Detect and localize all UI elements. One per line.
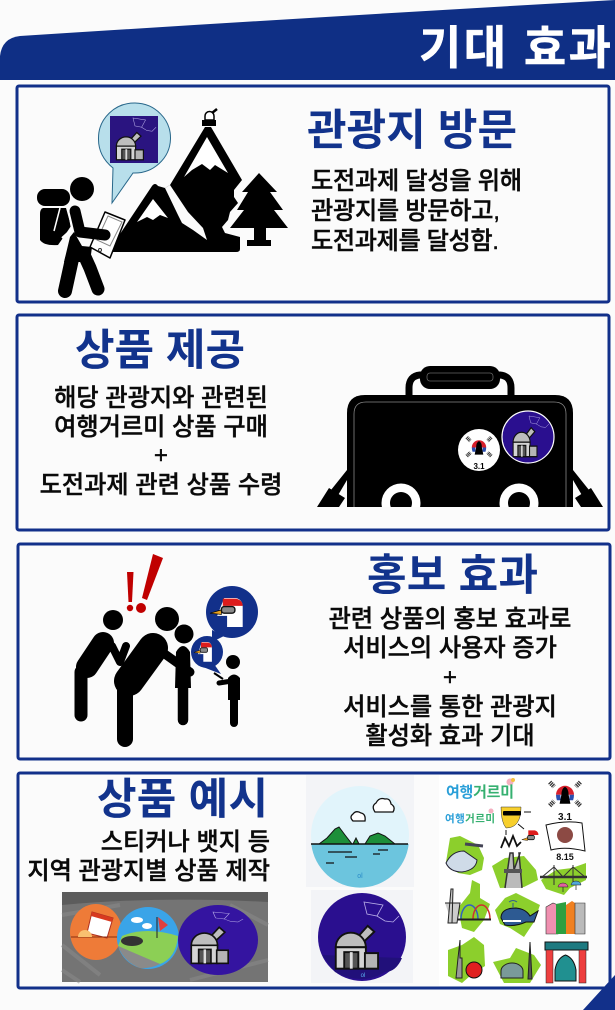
icon: speech bubble with observatory (98, 103, 170, 203)
title: 기대 효과 (419, 22, 611, 74)
icon: hiker with phone (37, 177, 125, 291)
body text: 도전과제를 달성함. (311, 228, 499, 255)
panel: promotion effect (18, 544, 610, 759)
heading: 상품 예시 (97, 776, 268, 824)
body text: 여행거르미 상품 구매 (54, 414, 268, 441)
body text (40, 385, 282, 499)
flag stickers: 8.15 (556, 852, 574, 862)
body text: + (443, 664, 457, 691)
landmark icons (445, 844, 588, 983)
logo stickers: 여행거르미 (446, 784, 514, 801)
badge: island: ol (357, 873, 363, 880)
body text: 서비스를 통한 관광지 (343, 694, 557, 721)
logo stickers (445, 778, 515, 825)
body text (329, 606, 571, 750)
body text: 도전과제 달성을 위해 (311, 168, 522, 195)
body text: 스티커나 뱃지 등 (101, 829, 270, 856)
body text: 지역 관광지별 상품 제작 (27, 858, 270, 885)
body text: 관련 상품의 홍보 효과로 (329, 606, 571, 633)
body text: 관광지를 방문하고, (311, 198, 500, 225)
body text: 도전과제 관련 상품 수령 (40, 472, 282, 499)
body text: 활성화 효과 기대 (365, 723, 535, 750)
body text: 서비스의 사용자 증가 (343, 635, 557, 662)
photo: three badges (62, 892, 268, 982)
badge: 3.1 (458, 429, 500, 471)
badge: observatory (311, 890, 413, 983)
flag stickers (546, 782, 585, 862)
body text: + (154, 442, 168, 469)
body text (311, 168, 522, 255)
body text (27, 829, 270, 885)
icon: bag with badges (317, 366, 603, 522)
corner triangle (583, 975, 615, 1010)
regional stickers (446, 836, 586, 983)
purple badge (178, 905, 258, 975)
icon: exclamation marks (127, 554, 163, 613)
badge: island (306, 775, 414, 888)
orange badge (70, 904, 122, 960)
heading: 홍보 효과 (367, 552, 538, 600)
heading: 관광지 방문 (307, 107, 517, 155)
body text: 해당 관광지와 관련된 (54, 385, 268, 412)
panel: tourist site visit (17, 86, 609, 302)
icon: speech bubbles with mascot (191, 586, 258, 674)
mascot sticker (501, 830, 538, 848)
badge: observatory: ol (361, 973, 365, 979)
header banner (0, 0, 615, 80)
blue badge (117, 907, 179, 969)
logo stickers: 여행거르미 (445, 812, 495, 825)
icon: pine tree (230, 173, 288, 246)
flag stickers: 3.1 (558, 812, 572, 823)
icon: mountains (108, 109, 242, 252)
icon: people looking at phone (81, 607, 240, 739)
sun sticker (501, 807, 531, 835)
panel: product examples (18, 773, 610, 988)
panel: product offering (17, 315, 609, 530)
badge: observatory (502, 411, 554, 463)
sticker sheet (439, 775, 590, 986)
badge: 3.1: 3.1 (473, 462, 485, 471)
heading: 상품 제공 (75, 327, 245, 375)
